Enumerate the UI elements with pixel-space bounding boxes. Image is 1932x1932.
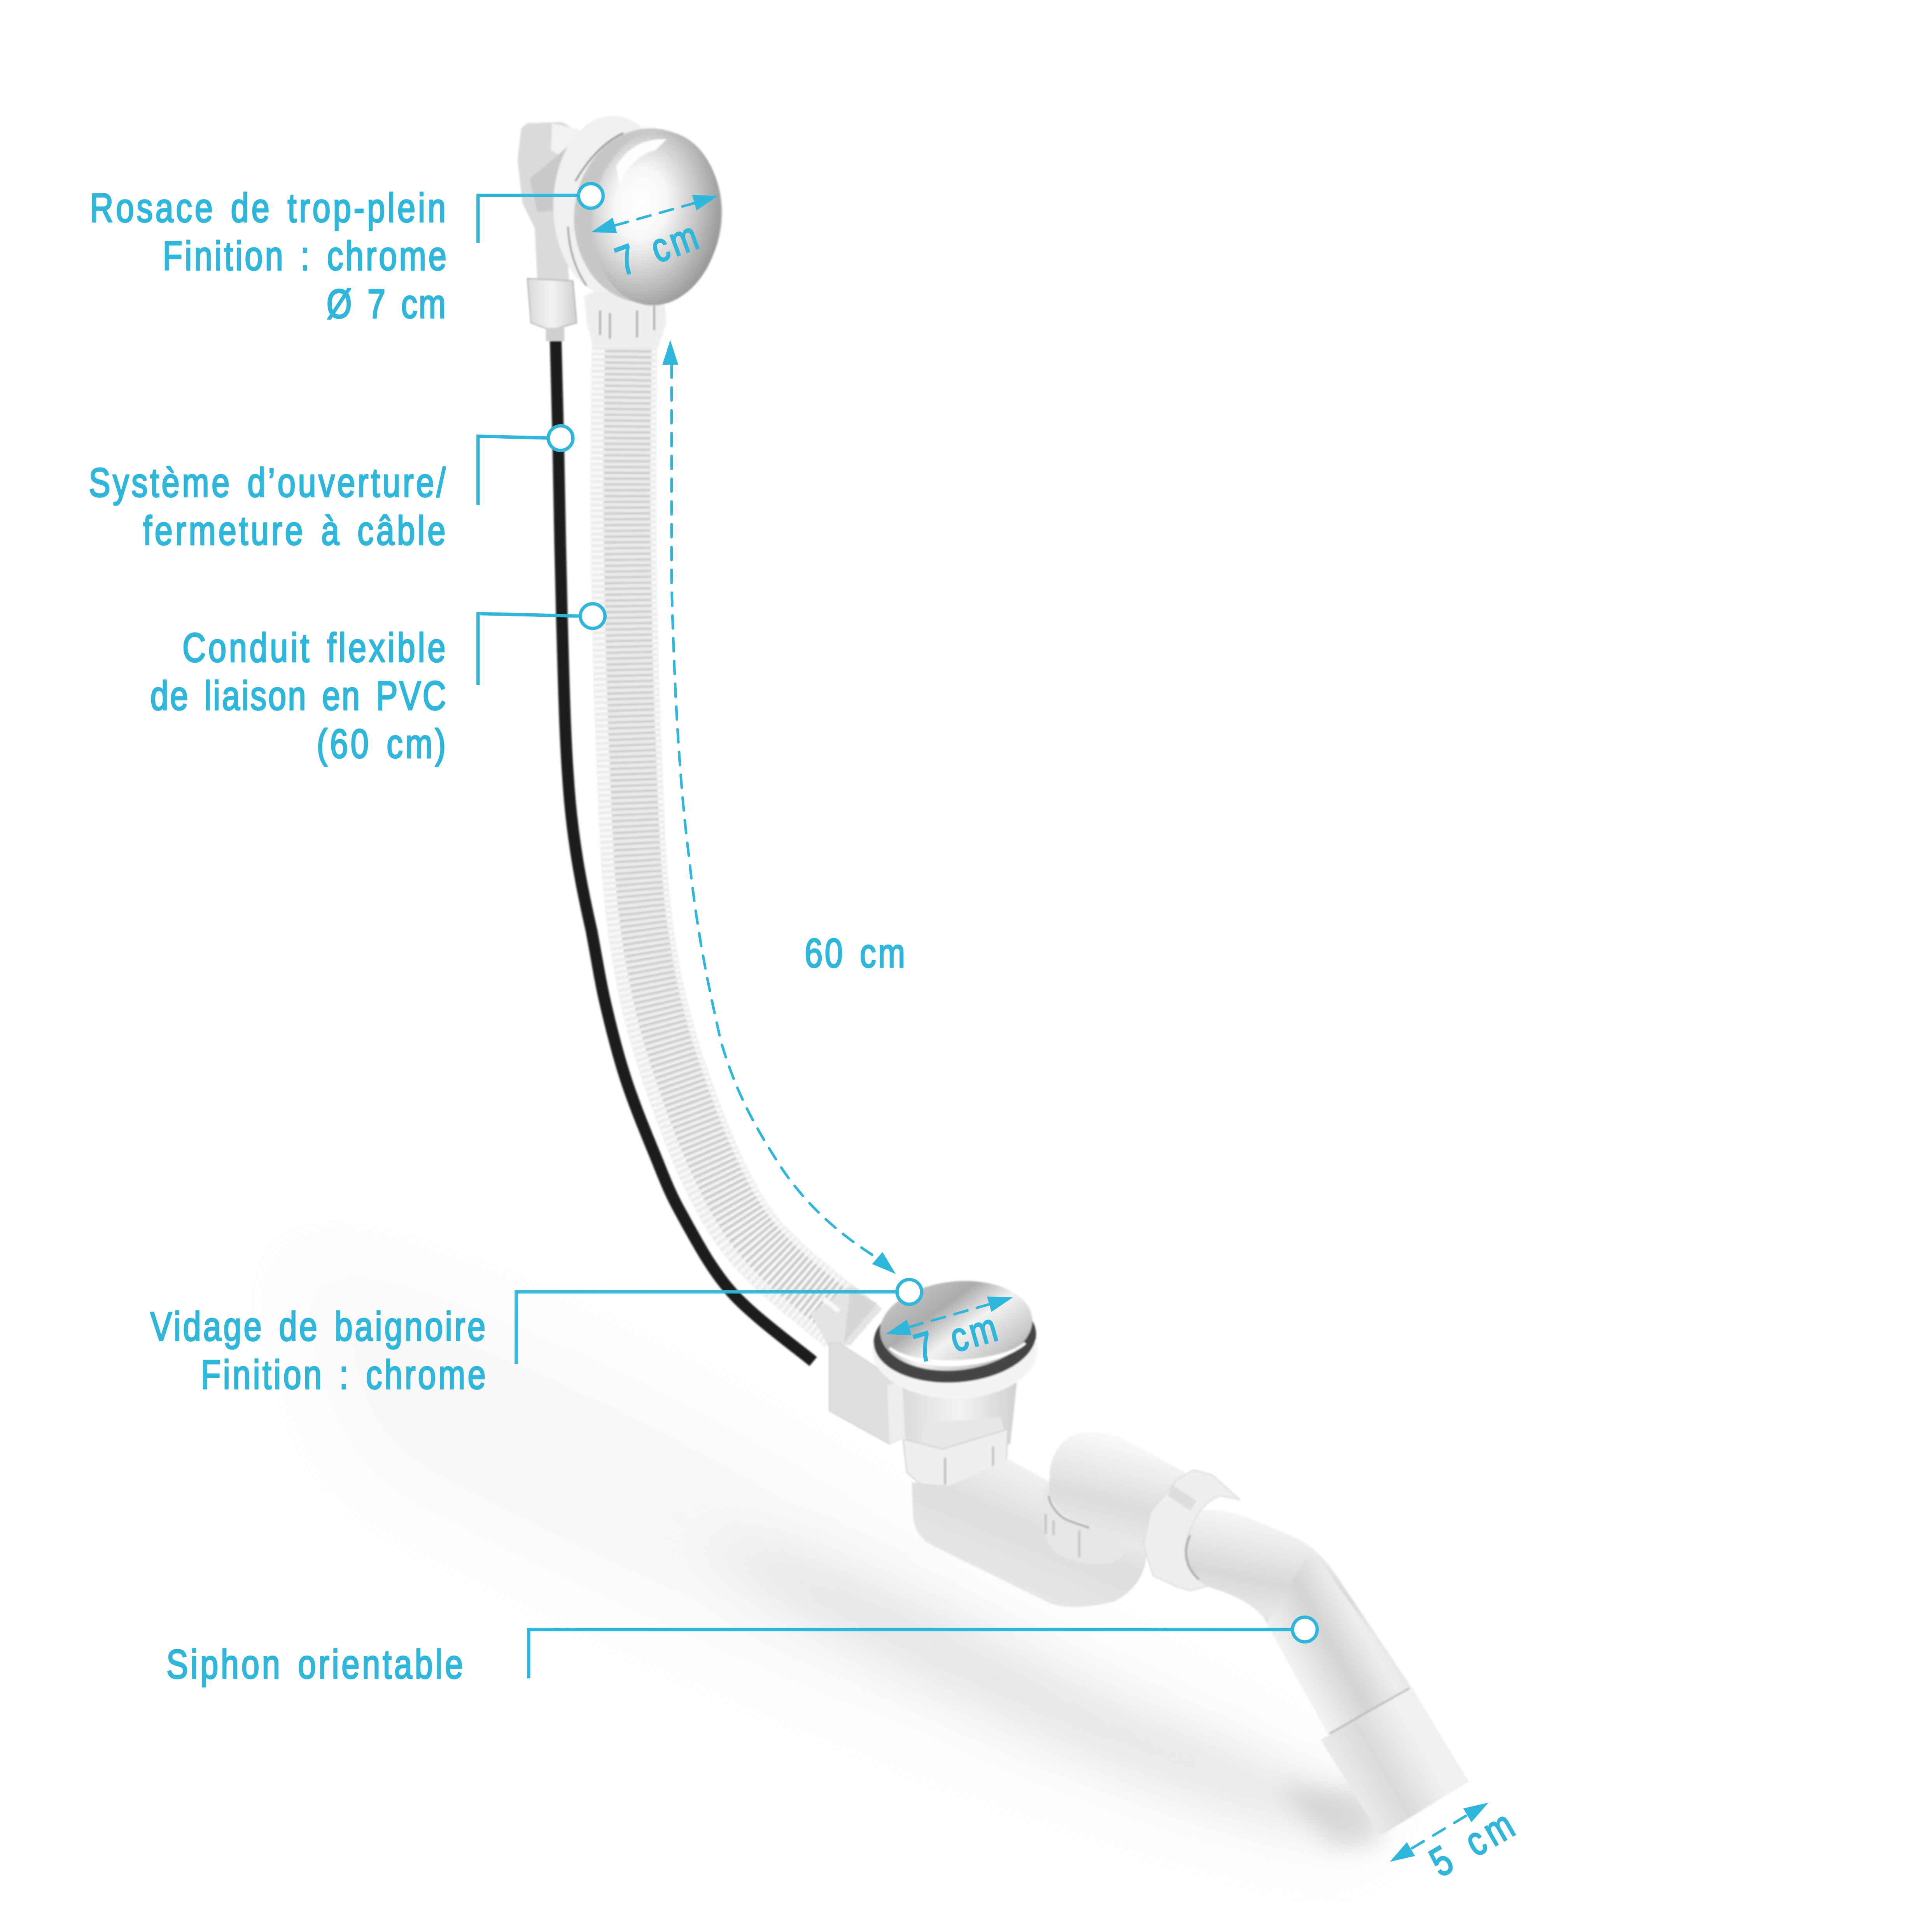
dimension: outlet diameter: 5 cm (1422, 1802, 1522, 1886)
dimension: rosette diameter: 7 cm (610, 213, 704, 285)
outer ring (553, 116, 672, 296)
product: black opening cable (556, 340, 813, 1362)
label: flexible conduit (150, 625, 446, 767)
callout: flexible conduit (150, 604, 605, 767)
small nut (1042, 1484, 1129, 1564)
product: overflow rosette (518, 116, 731, 347)
dimension: conduit length: 60 cm (805, 931, 905, 976)
dome collar band (565, 121, 731, 310)
callout: siphon (166, 1617, 1317, 1687)
side body and T connector (518, 122, 581, 281)
body (902, 1374, 1018, 1444)
dimension: conduit length (662, 340, 905, 1274)
label: flexible conduit: Conduit flexible (182, 625, 446, 671)
elbow (1048, 1432, 1185, 1555)
hose connector (811, 1285, 882, 1346)
label: bath waste: Vidage de baignoire (150, 1304, 485, 1349)
label: rosette: Ø 7 cm (327, 282, 446, 327)
label: flexible conduit: (60 cm) (317, 721, 446, 767)
cable connector (546, 328, 564, 341)
label: rosette (90, 185, 446, 327)
label: bath waste (150, 1304, 486, 1398)
bracket box (829, 1343, 909, 1444)
label: rosette: Rosace de trop-plein (90, 185, 446, 231)
product: flexible conduit (623, 332, 851, 1323)
chrome dome (584, 124, 730, 312)
label: cable system (89, 460, 446, 554)
black gasket (871, 1288, 1039, 1388)
label: flexible conduit: de liaison en PVC (150, 673, 446, 719)
chrome cap (875, 1274, 1037, 1378)
floor shadow (284, 1257, 1392, 1860)
dimension: rosette diameter (591, 195, 718, 285)
label: siphon: Siphon orientable (166, 1642, 463, 1687)
dimension: waste cap diameter: 7 cm (909, 1305, 1002, 1372)
outlet tube upper (1178, 1510, 1412, 1735)
label: cable system: Système d’ouverture/ (89, 460, 446, 506)
end sleeve (1321, 1685, 1469, 1836)
label: rosette: Finition : chrome (163, 233, 446, 279)
product: orientable siphon (912, 1432, 1469, 1836)
dimension: waste cap diameter (886, 1297, 1013, 1372)
callout: overflow rosette (90, 184, 603, 327)
callout: bath waste (150, 1279, 922, 1398)
white flange (872, 1302, 1038, 1398)
large nut (1143, 1470, 1239, 1591)
callout: cable system (89, 426, 573, 554)
union nut (903, 1429, 1008, 1487)
label: cable system: fermeture à câble (143, 508, 446, 554)
threaded neck nut (584, 289, 667, 347)
product: bath waste fitting (811, 1274, 1039, 1487)
label: bath waste: Finition : chrome (201, 1352, 486, 1398)
trap (912, 1459, 1156, 1607)
clamp collar (527, 278, 577, 330)
